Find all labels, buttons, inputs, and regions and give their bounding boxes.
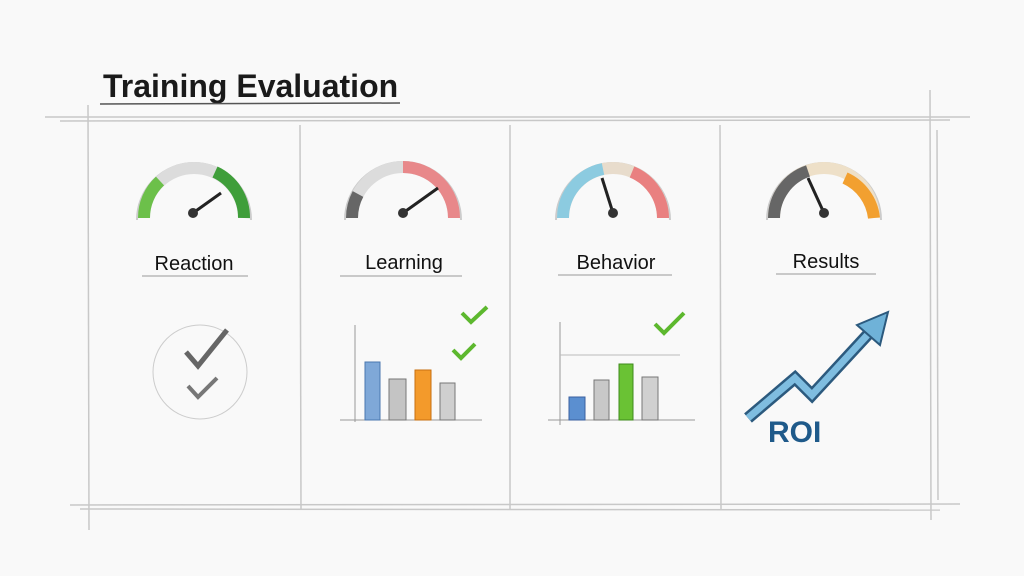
label: results (776, 251, 876, 274)
icon: ROI arrow (748, 312, 888, 418)
bar chart: behavior (548, 313, 695, 425)
panel: behavior (548, 163, 695, 425)
panel: reaction (137, 163, 251, 419)
icon: green checks (453, 307, 487, 358)
icon: green check (655, 313, 684, 333)
gauge: learning (345, 162, 461, 220)
panel: learning (340, 162, 487, 422)
label: behavior (558, 252, 672, 275)
label: behavior: Behavior (577, 252, 656, 274)
icon: checkmarks (153, 325, 247, 419)
bar chart: learning (340, 307, 487, 422)
gauge: behavior (556, 163, 670, 220)
label: results: Results (793, 251, 859, 273)
label: learning (340, 252, 462, 276)
text: ROI: ROI (768, 416, 821, 449)
title: Training Evaluation (103, 68, 398, 104)
gauge: results (767, 163, 881, 220)
gauge: reaction (137, 163, 251, 220)
panel: results (748, 163, 888, 449)
label: learning: Learning (365, 252, 443, 274)
label: reaction: Reaction (155, 253, 233, 275)
